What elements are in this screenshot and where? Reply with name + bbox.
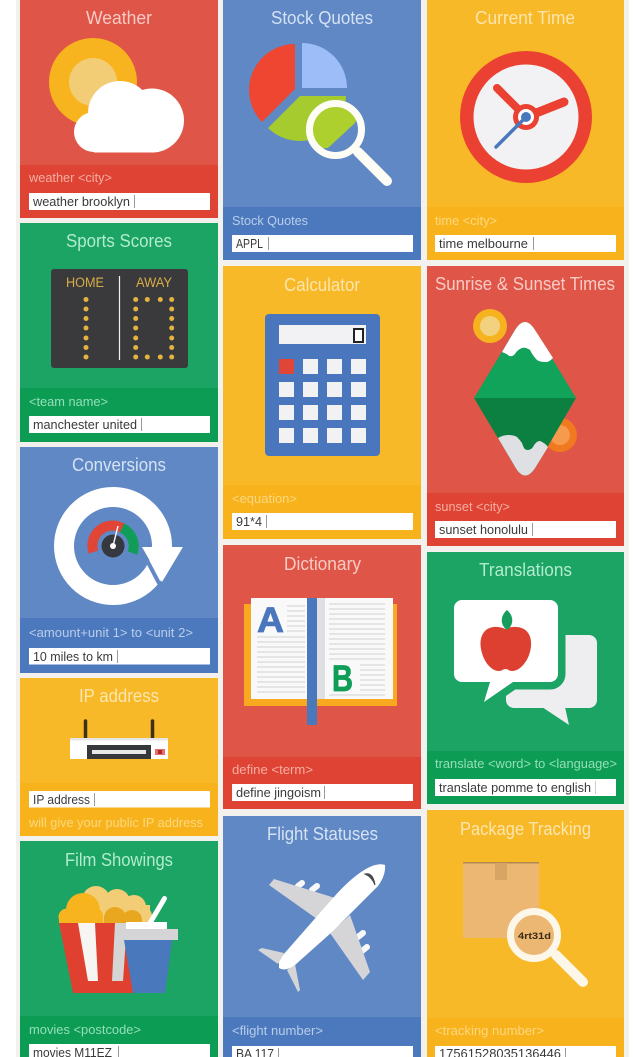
- panel: weather: [20, 0, 218, 218]
- syntax note: will give your public IP address: [28, 815, 203, 830]
- search box: weather brooklyn: [32, 194, 130, 209]
- icon: mountain with suns: [473, 309, 577, 476]
- syntax label: weather <city>: [28, 170, 112, 185]
- search box: [232, 513, 413, 530]
- search box: APPL: [236, 236, 263, 251]
- heading: calculator: Calculator: [284, 275, 360, 295]
- icon: sun and cloud: [49, 38, 184, 152]
- search box: manchester united: [33, 417, 137, 432]
- syntax label: translate <word> to <language>: [435, 756, 617, 771]
- syntax label: define <term>: [232, 762, 313, 777]
- heading: conversions: Conversions: [72, 455, 166, 475]
- search box: 10 miles to km: [33, 649, 113, 664]
- search box: [232, 235, 413, 252]
- icon: clock: [460, 51, 592, 183]
- icon: package and magnifier: 4rt31d: [518, 931, 551, 942]
- panel: ip address: [20, 678, 218, 836]
- icon: open book: B: [332, 658, 353, 699]
- syntax label: <tracking number>: [435, 1023, 544, 1038]
- panel: package tracking: [427, 810, 624, 1057]
- panel: sunrise and sunset times: [427, 266, 624, 546]
- icon: package and magnifier: [463, 862, 583, 982]
- heading: current time: Current Time: [475, 8, 575, 28]
- panel: sports scores: [20, 223, 218, 442]
- heading: film showings: Film Showings: [65, 850, 173, 870]
- search box: [29, 1044, 210, 1057]
- search box: define jingoism: [236, 785, 321, 800]
- panel: calculator: [223, 266, 421, 539]
- search box: IP address: [33, 792, 90, 807]
- panel: stock quotes: [223, 0, 421, 260]
- heading: package tracking: Package Tracking: [460, 819, 591, 839]
- panel: translations: [427, 552, 624, 804]
- syntax label: <team name>: [29, 394, 108, 409]
- panel: dictionary: [223, 545, 421, 809]
- icon: open book: A: [257, 601, 284, 640]
- search box: [232, 1046, 413, 1057]
- panel: current time: [427, 0, 624, 260]
- heading: dictionary: Dictionary: [284, 554, 361, 574]
- search box: translate pomme to english: [439, 780, 591, 795]
- icon: scoreboard: [51, 269, 188, 368]
- heading: translations: Translations: [479, 560, 572, 580]
- icon: scoreboard: AWAY: [136, 275, 172, 290]
- icon: airplane: [258, 864, 385, 992]
- search box: [435, 1046, 616, 1057]
- search box: [29, 648, 210, 664]
- syntax label: <amount+unit 1> to <unit 2>: [29, 625, 193, 640]
- heading: weather: Weather: [86, 8, 152, 28]
- heading: stock quotes: Stock Quotes: [271, 8, 373, 28]
- search box: [435, 521, 616, 538]
- icon: router: [70, 721, 168, 759]
- icon: calculator: [265, 314, 380, 456]
- icon: open book: [244, 598, 397, 725]
- search box: [435, 235, 616, 252]
- icon: popcorn and drink: [58, 886, 178, 993]
- icon: scoreboard: HOME: [66, 275, 104, 290]
- heading: ip address: IP address: [79, 686, 159, 706]
- heading: flight statuses: Flight Statuses: [267, 824, 378, 844]
- search box: [232, 784, 413, 801]
- search box: sunset honolulu: [439, 522, 528, 537]
- syntax label: sunset <city>: [435, 499, 510, 514]
- search box: [29, 193, 210, 210]
- icon: pie chart and magnifier: [249, 43, 387, 181]
- icon: conversion arrow and gauge: [64, 497, 183, 595]
- syntax label: movies <postcode>: [29, 1022, 141, 1037]
- syntax label: time <city>: [435, 213, 497, 228]
- search box: 91*4: [236, 514, 262, 529]
- search box: [29, 416, 210, 433]
- syntax label: <flight number>: [232, 1023, 323, 1038]
- panel: conversions: [20, 447, 218, 673]
- panel: flight statuses: [223, 816, 421, 1057]
- heading: sunrise and sunset times: Sunrise & Sunset Times: [435, 274, 615, 294]
- panel: film showings: [20, 841, 218, 1057]
- heading: sports scores: Sports Scores: [66, 231, 172, 251]
- icon: speech bubbles with apple: [454, 600, 597, 725]
- search box: [29, 791, 210, 808]
- search box: time melbourne: [439, 236, 528, 251]
- syntax label: <equation>: [232, 491, 297, 506]
- syntax label: Stock Quotes: [232, 213, 308, 228]
